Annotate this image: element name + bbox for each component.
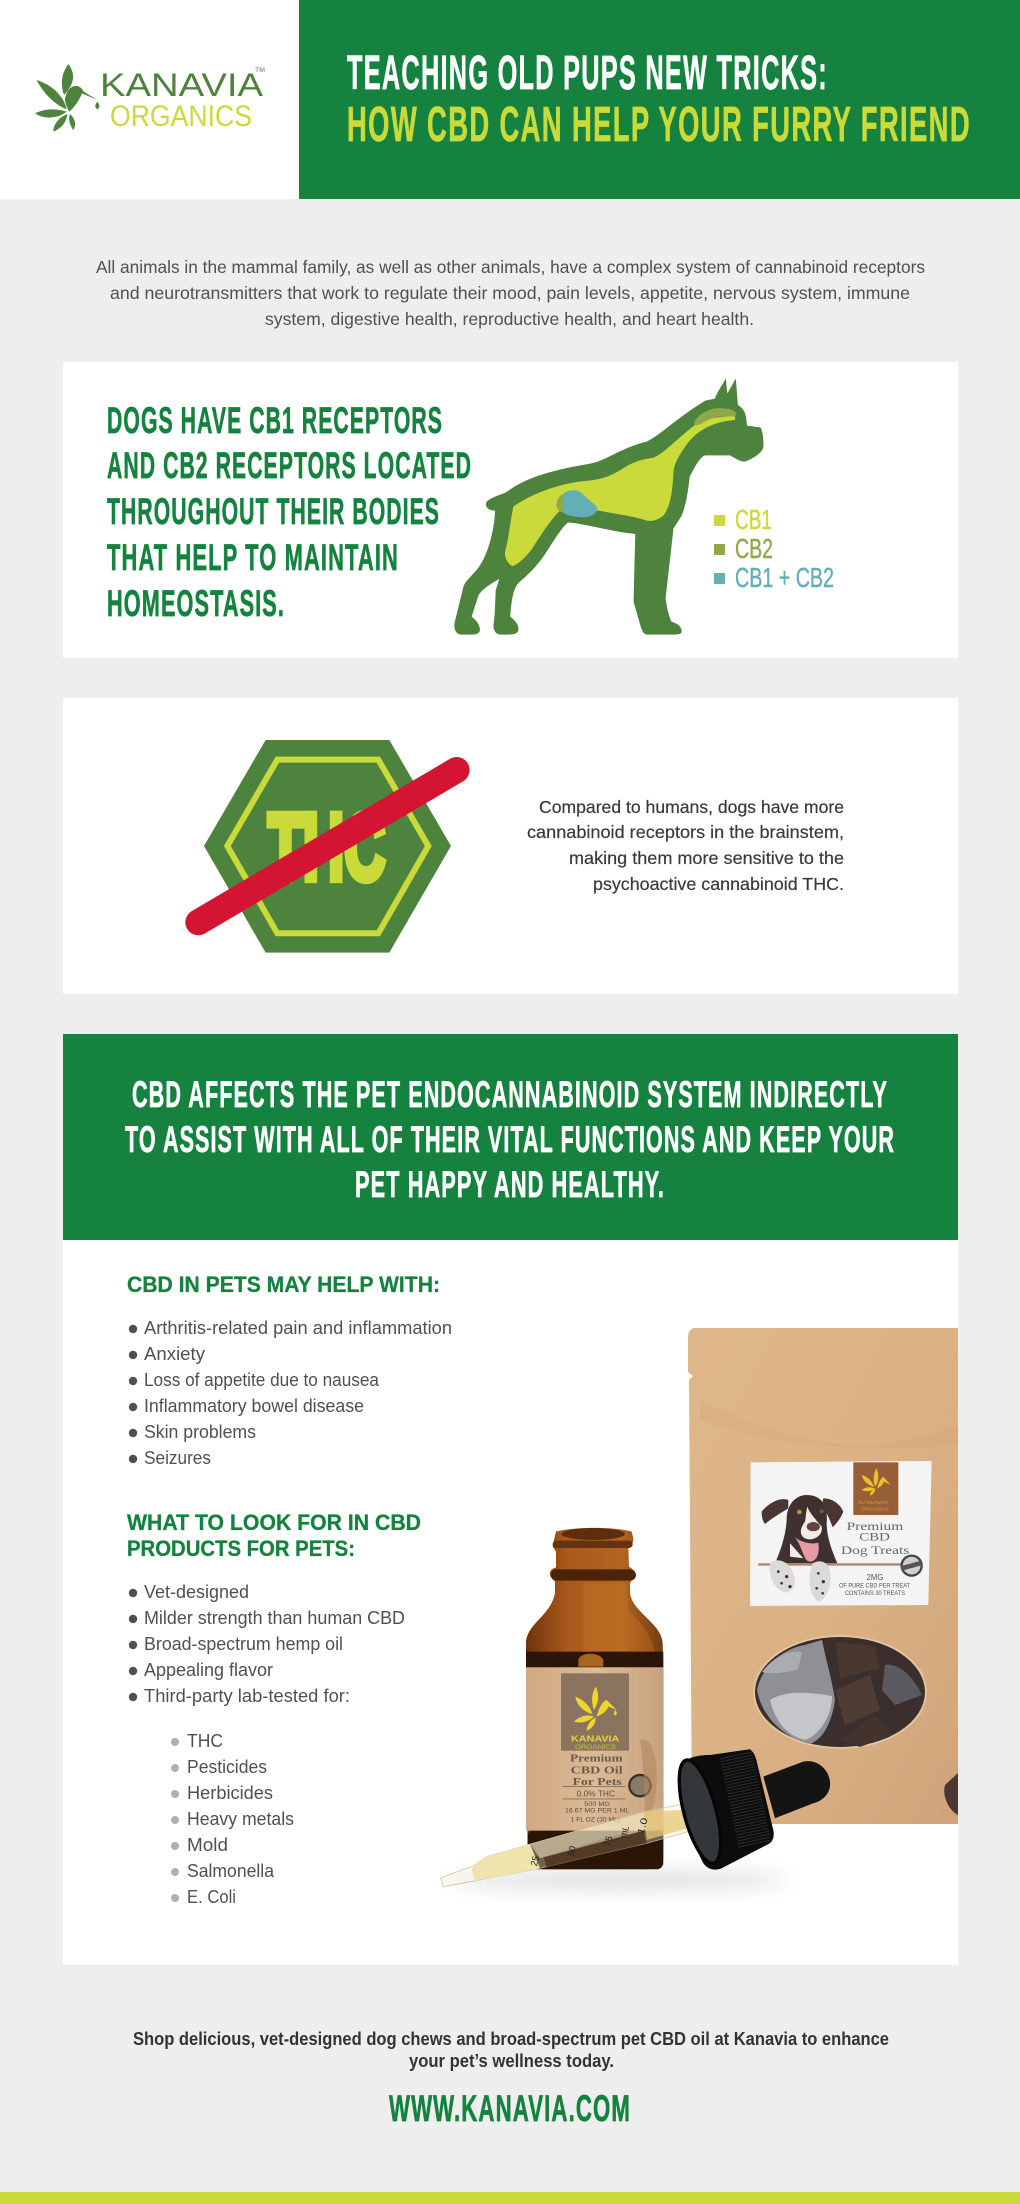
product: CBD oil bottle and dropper: KANAVIA [571, 1735, 620, 1744]
icon: hemp leaf hummingbird [35, 64, 99, 132]
header: title panel [299, 0, 1020, 199]
THC text block: cannabinoid receptors in the brainstem, [527, 822, 844, 842]
product: CBD oil bottle and dropper: 500 MG [584, 1802, 610, 1808]
product: CBD oil bottle and dropper: ORGANICS [575, 1744, 617, 1751]
product: CBD oil bottle and dropper: 1 FL OZ (30 ML) [571, 1818, 620, 1824]
list: what to look for: Broad-spectrum hemp oil [144, 1634, 343, 1654]
heading: what to look for: PRODUCTS FOR PETS: [127, 1536, 355, 1561]
logo trademark: TM [255, 68, 265, 74]
product: CBD oil bottle and dropper [441, 1528, 830, 1887]
product: shadow under bottle and dropper [450, 1872, 790, 1888]
sub-list: lab tests: Mold [187, 1835, 228, 1855]
panel: THC [63, 698, 958, 994]
dropper measurement marks: 50 [566, 1845, 578, 1857]
bag label: 2MG [867, 1573, 883, 1582]
dog portrait on label [758, 1495, 903, 1602]
list: may help with [129, 1318, 452, 1468]
THC text block: psychoactive cannabinoid THC. [593, 874, 844, 894]
bag label: CBD [859, 1530, 890, 1544]
intro text block: system, digestive health, reproductive health, and heart health. [265, 309, 754, 329]
bag label: KANAVIA [858, 1500, 889, 1506]
bottle label [526, 1667, 663, 1831]
dropper glass [441, 1804, 700, 1887]
legend: CB1 [735, 504, 772, 535]
icon: crossed-out THC hexagon: THC [268, 795, 385, 901]
list: what to look for: Third-party lab-tested for: [144, 1686, 350, 1706]
legend [714, 504, 834, 593]
receptors heading: HOMEOSTASIS. [107, 582, 285, 624]
panel: CBD benefits banner [63, 1034, 958, 1240]
banner heading: PET HAPPY AND HEALTHY. [355, 1163, 665, 1205]
header: logo panel [0, 0, 299, 199]
heading: what to look for: WHAT TO LOOK FOR IN CBD [127, 1510, 421, 1535]
list: may help with: Skin problems [144, 1422, 256, 1442]
product: CBD oil bottle and dropper: CBD Oil [571, 1764, 623, 1776]
heading: what to look for [127, 1510, 421, 1561]
logo wordmark: Organics: ORGANICS [110, 100, 252, 133]
heading: may help with: CBD IN PETS MAY HELP WITH: [127, 1272, 440, 1297]
THC text block [527, 797, 844, 894]
bag label: Premium [847, 1519, 904, 1533]
intro text block: All animals in the mammal family, as well as other animals, have a complex system of cannabinoid receptors [96, 257, 925, 277]
intro text block [96, 257, 925, 329]
footer text: your pet’s wellness today. [409, 2051, 614, 2071]
dropper measurement marks: 1.0 [636, 1817, 650, 1835]
product: dog treats bag [688, 1328, 958, 1824]
list: what to look for: Vet-designed [144, 1582, 249, 1602]
panel: receptors [63, 362, 958, 658]
product: CBD oil bottle and dropper: For Pets [573, 1776, 622, 1788]
receptors heading: THAT HELP TO MAINTAIN [107, 536, 399, 578]
dropper measurement marks: 75 [602, 1835, 615, 1847]
list: may help with: Loss of appetite due to nausea [144, 1370, 380, 1390]
sub-list: lab tests: Heavy metals [187, 1809, 294, 1829]
bag label: Dog Treats [841, 1543, 910, 1557]
banner heading [125, 1073, 895, 1205]
receptors heading: AND CB2 RECEPTORS LOCATED [107, 444, 472, 486]
footer text: Shop delicious, vet-designed dog chews and broad-spectrum pet CBD oil at Kanavia to enhance [133, 2029, 889, 2049]
list: may help with: Anxiety [144, 1344, 205, 1364]
sub-list: lab tests: THC [187, 1731, 223, 1751]
sub-list: lab tests: E. Coli [187, 1887, 236, 1907]
THC text block: Compared to humans, dogs have more [539, 797, 844, 817]
footer URL: WWW.KANAVIA.COM [389, 2087, 631, 2129]
treat at bag edge [944, 1773, 958, 1815]
bag label: CONTAINS 30 TREATS [845, 1591, 905, 1597]
receptors heading: THROUGHOUT THEIR BODIES [107, 490, 440, 532]
bottom accent strip [0, 2192, 1020, 2204]
bag label: ORGANICS [861, 1507, 889, 1512]
intro text block: and neurotransmitters that work to regulate their mood, pain levels, appetite, nervous system, immune [110, 283, 910, 303]
legend: CB2 [735, 533, 773, 564]
bottle glass [526, 1528, 663, 1869]
icon: crossed-out THC hexagon [198, 740, 457, 953]
dropper cap and bulb [763, 1761, 830, 1818]
bag window with treats [753, 1635, 927, 1749]
list: may help with: Seizures [144, 1448, 211, 1468]
sub-list: lab tests: Pesticides [187, 1757, 267, 1777]
sub-list: lab tests: Salmonella [187, 1861, 275, 1881]
dog diagram [454, 378, 763, 635]
sub-list: lab tests [171, 1731, 294, 1907]
receptors heading [107, 399, 472, 624]
panel: CBD details [63, 1240, 958, 1965]
list: what to look for [129, 1582, 405, 1706]
list: may help with: Inflammatory bowel disease [144, 1396, 364, 1416]
bag label [750, 1461, 932, 1606]
dropper measurement marks: 25 [529, 1855, 541, 1867]
dropper measurement marks [529, 1817, 650, 1867]
list: what to look for: Milder strength than human CBD [144, 1608, 405, 1628]
receptors heading: DOGS HAVE CB1 RECEPTORS [107, 399, 443, 441]
list: may help with: Arthritis-related pain and inflammation [144, 1318, 452, 1338]
list: what to look for: Appealing flavor [144, 1660, 273, 1680]
footer call to action [133, 2029, 889, 2129]
product: CBD oil bottle and dropper: 0.0% THC [577, 1789, 615, 1799]
dropper measurement marks: mL [618, 1825, 631, 1839]
bag label: OF PURE CBD PER TREAT [839, 1583, 910, 1589]
product: CBD oil bottle and dropper: 16.67 MG PER 1 ML [565, 1809, 630, 1815]
legend: CB1 + CB2 [735, 562, 834, 593]
footer text [133, 2029, 889, 2071]
THC text block: making them more sensitive to the [569, 848, 844, 868]
product: CBD oil bottle and dropper: Premium [570, 1753, 623, 1765]
sub-list: lab tests: Herbicides [187, 1783, 273, 1803]
logo wordmark: Kanavia: KANAVIA [100, 67, 264, 103]
